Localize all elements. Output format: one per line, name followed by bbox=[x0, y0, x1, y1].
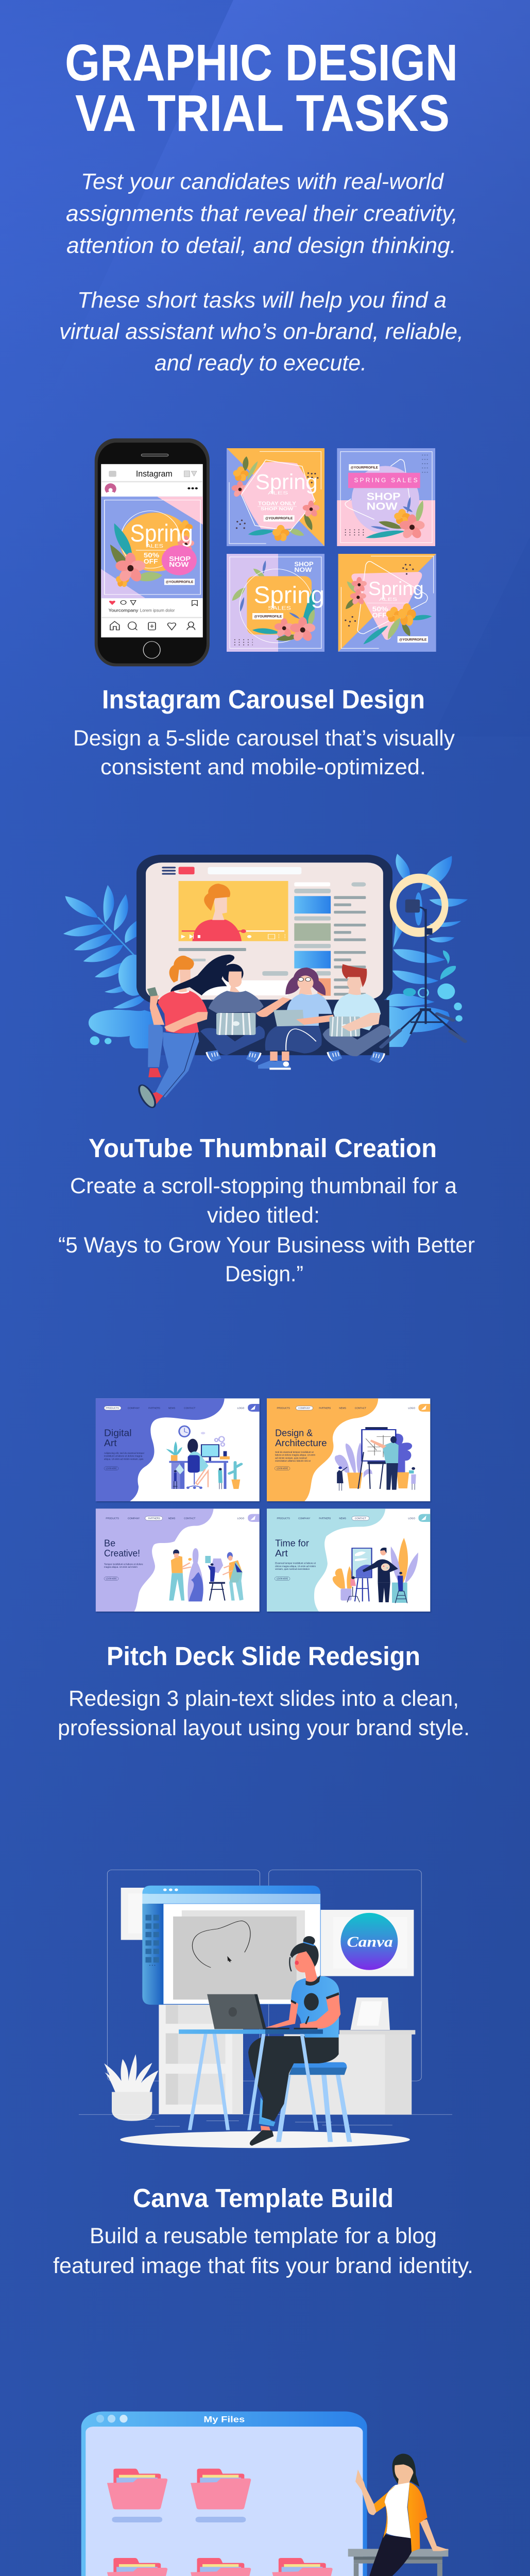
slide: Design & Architecture bbox=[267, 1398, 430, 1501]
card: Spring sales hexagon: TODAY ONLY bbox=[258, 501, 297, 507]
slide: Time for Art: NEWS bbox=[339, 1517, 346, 1520]
description: Instagram carousel bbox=[73, 726, 455, 779]
slide: Digital Art: incididunt ut labore et dolore magna bbox=[104, 1455, 143, 1458]
slide: Time for Art: CONTACT bbox=[355, 1517, 367, 1520]
icon: phone mockup: 50% bbox=[144, 552, 159, 559]
slide: Digital Art: Digital bbox=[104, 1428, 131, 1438]
slide: Digital Art: COMPANY bbox=[128, 1407, 140, 1410]
description: pitch deck: professional layout using your brand style. bbox=[58, 1716, 470, 1740]
icon: phone mockup: SHOP bbox=[169, 555, 191, 563]
slide: Digital Art: Adipiscing elit, sed do eiusmod tempor bbox=[104, 1452, 144, 1455]
panel: file organization bbox=[69, 2412, 457, 2576]
icon: four carousel post cards bbox=[227, 448, 436, 652]
card: Spring sales hexagon bbox=[227, 448, 324, 546]
icon: potted plant bbox=[104, 2054, 158, 2121]
slide: Time for Art: PRODUCTS bbox=[277, 1517, 290, 1520]
card: Spring sales banner: @YOURPROFILE bbox=[351, 466, 378, 469]
card: Spring sales square bbox=[227, 554, 324, 652]
slide: Design & Architecture: COMPANY bbox=[298, 1407, 311, 1410]
slide: Be Creative! bbox=[96, 1509, 260, 1612]
icon: folder bottom right bbox=[272, 2558, 333, 2576]
description: Instagram carousel: Design a 5-slide carousel that’s visually bbox=[73, 726, 455, 751]
slide: Digital Art: LOGO bbox=[237, 1407, 244, 1410]
icon: design app window bbox=[142, 1886, 414, 2005]
card: Spring sales square: NOW bbox=[294, 566, 312, 573]
slide: Time for Art: PARTNERS bbox=[319, 1517, 331, 1520]
slide: Design & Architecture: Sed do eiusmod tempor incididunt ut bbox=[275, 1451, 314, 1454]
icon: stool bbox=[276, 2062, 352, 2142]
description: Canva template: Build a reusable template for a blog bbox=[90, 2224, 437, 2248]
intro text block: attention to detail, and design thinking. bbox=[66, 233, 456, 258]
card: Spring sales square: SHOP bbox=[294, 561, 314, 568]
title: VA TRIAL TASKS bbox=[75, 84, 450, 142]
description: YouTube thumbnail: “5 Ways to Grow Your Business with Better bbox=[58, 1233, 475, 1258]
panel: pitch deck bbox=[58, 1398, 470, 1740]
title bbox=[65, 34, 458, 142]
panel: Canva template bbox=[53, 1870, 473, 2278]
figure: person in red shirt bbox=[136, 956, 208, 1109]
slide: Digital Art: PARTNERS bbox=[148, 1407, 160, 1410]
icon: desk bbox=[179, 2029, 323, 2130]
slide: Design & Architecture: labore et dolore magna aliqua. Ut enim bbox=[275, 1454, 315, 1456]
description: YouTube thumbnail: Design.” bbox=[225, 1262, 303, 1286]
illustration: designer at desk with Canva window bbox=[79, 1870, 452, 2148]
slide: Be Creative!: Be bbox=[104, 1538, 115, 1549]
slide: Design & Architecture: ad minim veniam, quis nostrud bbox=[275, 1457, 307, 1460]
icon: white shelving unit bbox=[159, 2005, 243, 2114]
illustration: video screen, team and ring light bbox=[63, 854, 468, 1109]
icon: phone mockup: Spring bbox=[130, 519, 193, 547]
description: pitch deck bbox=[58, 1686, 470, 1740]
slide: Be Creative!: COMPANY bbox=[128, 1517, 140, 1520]
slide: Be Creative!: magna aliqua. Ut enim ad minim bbox=[104, 1566, 138, 1569]
icon: laptop bbox=[207, 1994, 317, 2029]
slide: Design & Architecture: Architecture bbox=[275, 1438, 327, 1448]
intro text block: virtual assistant who’s on-brand, reliable, bbox=[59, 319, 464, 344]
slide: Be Creative!: LEARN MORE bbox=[106, 1578, 117, 1580]
card: Spring sales triangle: Spring bbox=[368, 578, 424, 599]
slide: Design & Architecture: LOGO bbox=[408, 1407, 415, 1410]
slide: Time for Art: Art bbox=[275, 1548, 288, 1558]
description: YouTube thumbnail: video titled: bbox=[207, 1203, 320, 1228]
slide: Time for Art: LEARN MORE bbox=[277, 1578, 288, 1580]
slide: Design & Architecture: Design & bbox=[275, 1428, 313, 1438]
illustration: file window and presenter bbox=[81, 2412, 449, 2576]
card: Spring sales square: Spring bbox=[254, 582, 324, 608]
icon: folder bottom left bbox=[107, 2558, 167, 2576]
icon: phone mockup: Lorem ipsum dolor bbox=[140, 608, 175, 613]
slide: Digital Art: aliqua. Ut enim ad minim veniam, quis bbox=[104, 1458, 144, 1461]
card: Spring sales banner: SPRING SALES bbox=[354, 477, 418, 484]
icon: phone mockup: ALES bbox=[146, 544, 163, 549]
figure: designer bbox=[248, 1936, 340, 2146]
slide: Time for Art: dolore magna aliqua. Ut enim ad minim bbox=[275, 1565, 316, 1568]
slide: Time for Art: Time for bbox=[275, 1538, 309, 1549]
slide: Design & Architecture: exercitation ullamco laboris nisi ut bbox=[275, 1460, 311, 1463]
slide: Be Creative!: NEWS bbox=[168, 1517, 176, 1520]
card: Spring sales square: @YOURPROFILE bbox=[254, 615, 282, 618]
slide: Time for Art bbox=[267, 1509, 430, 1612]
slide: Digital Art: CONTACT bbox=[184, 1407, 196, 1410]
icon: phone mockup: Instagram bbox=[136, 469, 173, 479]
slide: Be Creative!: PRODUCTS bbox=[106, 1517, 119, 1520]
heading: Canva Template Build: Canva Template Build bbox=[133, 2183, 394, 2213]
card: Spring sales hexagon: @YOURPROFILE bbox=[265, 517, 293, 520]
description: pitch deck: Redesign 3 plain-text slides into a clean, bbox=[69, 1686, 459, 1711]
slide: Design & Architecture: PARTNERS bbox=[319, 1407, 331, 1410]
description: YouTube thumbnail bbox=[58, 1174, 475, 1286]
description: Canva template: featured image that fits your brand identity. bbox=[53, 2253, 473, 2278]
icon: folder top left bbox=[107, 2469, 167, 2522]
slide: Digital Art: Art bbox=[104, 1438, 117, 1448]
icon: ring light on tripod bbox=[381, 874, 465, 1047]
heading: YouTube Thumbnail Creation: YouTube Thumbnail Creation bbox=[89, 1133, 437, 1163]
slide: Be Creative!: Tempor incididunt ut labore et dolore bbox=[104, 1563, 143, 1566]
slide: Digital Art: NEWS bbox=[168, 1407, 176, 1410]
figure: person in grey shirt with laptop bbox=[170, 955, 291, 1062]
icon: left foliage bbox=[63, 885, 163, 1048]
icon: Canva logo badge: Canva bbox=[347, 1934, 393, 1950]
slide: Be Creative!: LOGO bbox=[237, 1517, 244, 1520]
slide: Digital Art: LEARN MORE bbox=[106, 1467, 117, 1470]
slide: Be Creative!: CONTACT bbox=[184, 1517, 196, 1520]
card: Spring sales hexagon: SHOP NOW bbox=[261, 506, 294, 512]
icon: phone mockup: Yourcompany bbox=[109, 608, 139, 613]
icon: side cabinet with photo frame bbox=[284, 1997, 415, 2115]
slide: Time for Art: COMPANY bbox=[298, 1517, 311, 1520]
card: Spring sales square: SALES bbox=[268, 605, 291, 611]
card: Spring sales hexagon: Spring bbox=[255, 469, 318, 494]
intro text block bbox=[59, 169, 464, 376]
heading: Instagram Carousel Design: Instagram Carousel Design bbox=[102, 685, 425, 714]
icon: phone mockup: @YOURPROFILE bbox=[166, 580, 193, 584]
card: Spring sales banner: NOW bbox=[367, 500, 398, 512]
icon: monitor with video layout bbox=[136, 855, 392, 1055]
icon: phone mockup bbox=[95, 438, 210, 666]
figure: person with glasses and tablet bbox=[258, 968, 333, 1070]
icon: My Files window: My Files bbox=[203, 2415, 245, 2424]
intro text block: and ready to execute. bbox=[155, 350, 367, 376]
icon: folder top middle bbox=[191, 2469, 251, 2522]
card: Spring sales triangle: 50% bbox=[372, 606, 388, 613]
intro text block: Test your candidates with real-world bbox=[81, 169, 444, 194]
illustration: four landing-style slides bbox=[96, 1398, 430, 1612]
slide: Digital Art bbox=[96, 1398, 260, 1501]
card: Spring sales hexagon: ALES bbox=[268, 490, 288, 495]
icon: Canva logo badge bbox=[340, 1913, 398, 1970]
slide: Design & Architecture: NEWS bbox=[339, 1407, 346, 1410]
intro text block: assignments that reveal their creativity, bbox=[66, 201, 458, 226]
card: Spring sales banner bbox=[337, 448, 435, 546]
icon: side table bbox=[348, 2549, 448, 2576]
figure: presenter bbox=[336, 2454, 449, 2576]
card: Spring sales triangle: @YOURPROFILE bbox=[399, 638, 426, 641]
slide: Time for Art: LOGO bbox=[408, 1517, 415, 1520]
icon: My Files window bbox=[81, 2412, 367, 2576]
description: YouTube thumbnail: Create a scroll-stopping thumbnail for a bbox=[70, 1174, 457, 1198]
description: Instagram carousel: consistent and mobile-optimized. bbox=[100, 755, 426, 779]
slide: Time for Art: veniam, quis nostrud exercitation bbox=[275, 1568, 310, 1571]
card: Spring sales triangle: ALES bbox=[379, 597, 397, 602]
title: GRAPHIC DESIGN bbox=[65, 34, 458, 92]
intro text block: These short tasks will help you find a bbox=[77, 287, 447, 313]
slide: Design & Architecture: CONTACT bbox=[355, 1407, 367, 1410]
figure: person with red hair and laptop bbox=[323, 964, 391, 1063]
slide: Be Creative!: Creative! bbox=[104, 1548, 140, 1558]
card: Spring sales triangle: OFF bbox=[372, 612, 387, 619]
icon: folder bottom middle bbox=[191, 2558, 251, 2576]
card: Spring sales banner: SHOP bbox=[367, 491, 401, 503]
slide: Be Creative!: PARTNERS bbox=[148, 1517, 160, 1520]
icon: phone mockup: OFF bbox=[144, 558, 158, 566]
heading: Pitch Deck Slide Redesign: Pitch Deck Slide Redesign bbox=[107, 1641, 420, 1671]
slide: Design & Architecture: PRODUCTS bbox=[277, 1407, 290, 1410]
card: Spring sales triangle bbox=[338, 554, 436, 652]
panel: Instagram carousel bbox=[73, 438, 455, 779]
icon: phone mockup: NOW bbox=[169, 561, 189, 568]
slide: Time for Art: Eiusmod tempor incididunt ut labore et bbox=[275, 1562, 316, 1565]
slide: Digital Art: PRODUCTS bbox=[106, 1407, 119, 1410]
icon: right foliage bbox=[380, 854, 468, 1047]
panel: YouTube thumbnail bbox=[58, 854, 475, 1286]
description: Canva template bbox=[53, 2224, 473, 2278]
slide: Design & Architecture: LEARN MORE bbox=[277, 1467, 288, 1470]
